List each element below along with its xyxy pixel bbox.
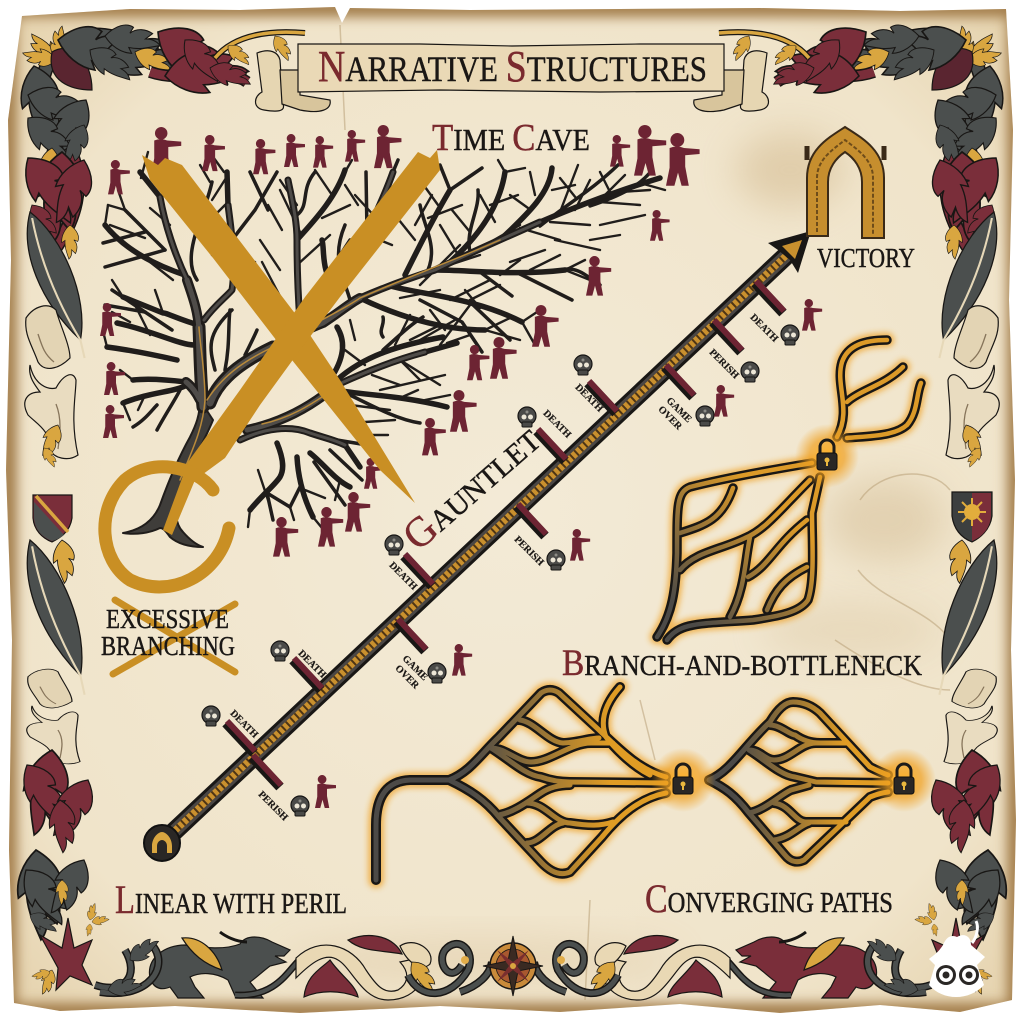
bottom ornamental border right: maroon beast xyxy=(534,932,931,1000)
victory gate icon xyxy=(807,127,884,238)
converging paths label: CONVERGING PATHS xyxy=(645,876,893,921)
gauntlet zombies xyxy=(315,299,822,808)
converging paths diagram xyxy=(376,687,888,880)
compass rose xyxy=(483,936,543,996)
gauntlet peril labels: OVER xyxy=(656,404,684,433)
tree: time cave xyxy=(103,150,665,547)
owl logo xyxy=(929,921,985,997)
left ornamental border xyxy=(13,14,305,997)
gauntlet skulls xyxy=(202,325,799,816)
gauntlet line arrow xyxy=(144,231,811,861)
gauntlet peril labels: DEATH xyxy=(748,312,780,345)
zombies around the tree xyxy=(100,125,700,557)
linear with peril label: LINEAR WITH PERIL xyxy=(115,877,347,922)
gauntlet peril labels: DEATH xyxy=(573,382,605,415)
branch and bottleneck label: BRANCH-AND-BOTTLENECK xyxy=(562,643,922,684)
shield: right sun xyxy=(952,492,992,542)
victory label: VICTORY xyxy=(817,243,915,273)
bottom ornamental border left: grey beast xyxy=(95,932,492,1000)
gauntlet peril labels: GAME xyxy=(664,395,694,425)
gauntlet peril labels: PERISH xyxy=(707,347,741,381)
lock: bottleneck xyxy=(795,424,859,488)
gauntlet peril labels: DEATH xyxy=(387,560,419,593)
excessive branching label with cross: BRANCHING xyxy=(101,631,235,661)
excessive branching label with cross: EXCESSIVE xyxy=(106,604,229,634)
gauntlet peril labels: DEATH xyxy=(541,408,573,441)
time cave heading: TIME CAVE xyxy=(432,117,590,159)
gauntlet heading: GAUNTLET xyxy=(394,417,549,560)
title banner scroll xyxy=(256,42,768,112)
title text: NARRATIVE STRUCTURES xyxy=(318,42,707,91)
gauntlet peril labels: PERISH xyxy=(512,534,546,568)
branch and bottleneck diagram xyxy=(657,340,921,640)
gauntlet peril labels: DEATH xyxy=(296,648,328,681)
gauntlet peril labels xyxy=(228,312,780,823)
shield: left heraldic xyxy=(33,495,72,542)
right ornamental border xyxy=(719,14,1011,997)
gauntlet ticks xyxy=(226,281,784,787)
lock: second convergence xyxy=(872,748,936,812)
gauntlet peril labels: OVER xyxy=(393,663,421,692)
gauntlet peril labels: PERISH xyxy=(256,789,290,823)
gold X over the tree xyxy=(142,150,440,535)
excessive branching label with cross xyxy=(101,600,235,674)
gold circle around trunk xyxy=(105,467,229,587)
gauntlet peril labels: DEATH xyxy=(228,708,260,741)
lock: first convergence xyxy=(651,748,715,812)
gauntlet peril labels: GAME xyxy=(400,653,430,683)
